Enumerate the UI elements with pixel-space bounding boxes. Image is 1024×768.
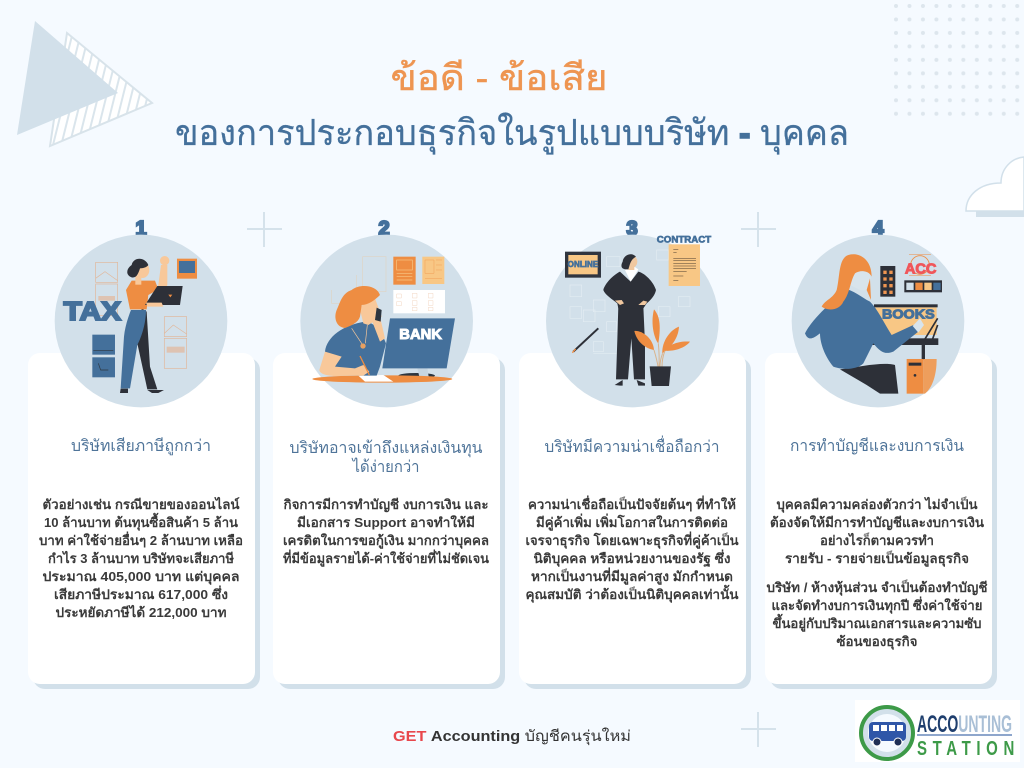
number 2: 2	[378, 218, 390, 240]
decoration: dot grid	[893, 0, 1024, 120]
card 4 body: ซ้อนของธุรกิจ	[836, 634, 918, 650]
illustration 3: woman in suit with plant: ONLINE	[568, 259, 599, 269]
card 1 body: เสียภาษีประมาณ 617,000 ซึ่ง	[54, 585, 228, 602]
subtitle: ของการประกอบธุรกิจในรูปแบบบริษัท - บุคคล	[175, 112, 849, 155]
card 2 heading: ได้ง่ายกว่า	[351, 457, 420, 476]
card 3 body: คุณสมบัติ ว่าต้องเป็นนิติบุคคลเท่านั้น	[526, 584, 739, 603]
card 2 heading	[290, 439, 483, 476]
card 2 body	[283, 497, 489, 567]
card 1 body: ประหยัดภาษีได้ 212,000 บาท	[56, 604, 226, 620]
illustration 4: woman at drawing board	[792, 235, 964, 407]
card 2 body: เครดิตในการขอกู้เงิน มากกว่าบุคคล	[283, 532, 489, 549]
illustration 2: bank woman at desk: BANK	[399, 327, 442, 343]
panel: card 4	[765, 353, 997, 689]
number 1: 1	[135, 218, 147, 240]
card 3 body: หากเป็นงานที่มีมูลค่าสูง มักกำหนด	[531, 567, 733, 585]
card 4 body: ขึ้นอยู่กับปริมาณเอกสารและความซับ	[772, 613, 982, 632]
logo: Accounting Station: STATION	[917, 737, 1020, 760]
illustration 2: bank woman at desk	[300, 235, 473, 407]
illustration 3: woman in suit with plant	[546, 235, 719, 407]
card 1 heading: บริษัทเสียภาษีถูกกว่า	[71, 437, 211, 456]
card 3 body: นิติบุคคล หรือหน่วยงานของรัฐ ซึ่ง	[534, 549, 730, 568]
card 2 body: ที่มีข้อมูลรายได้-ค่าใช้จ่ายที่ไม่ชัดเจน	[283, 549, 489, 567]
illustration 3: woman in suit with plant: CONTRACT	[657, 235, 711, 245]
card 1 body	[39, 496, 243, 620]
card 1 body: ตัวอย่างเช่น กรณีขายของออนไลน์	[42, 496, 240, 512]
card 4 body: รายรับ - รายจ่ายเป็นข้อมูลธุรกิจ	[785, 549, 969, 567]
panel: card 1	[28, 353, 260, 689]
card 2 body: มีเอกสาร Support อาจทำให้มี	[297, 514, 475, 530]
decoration: plus signs	[247, 212, 776, 747]
logo: Accounting Station	[855, 700, 1020, 762]
card 4 heading: การทำบัญชีและงบการเงิน	[790, 437, 964, 455]
card 2 heading: บริษัทอาจเข้าถึงแหล่งเงินทุน	[290, 439, 483, 458]
illustration 1: tax woman with laptop	[55, 235, 227, 407]
footer tagline: GET Accounting บัญชีคนรุ่นใหม่	[393, 727, 631, 746]
card 4 body: บุคคลมีความคล่องตัวกว่า ไม่จำเป็น	[776, 495, 978, 513]
illustration 4: woman at drawing board: ACC	[905, 261, 937, 277]
title: ข้อดี - ข้อเสีย	[390, 57, 608, 98]
decoration: cloud	[966, 157, 1024, 217]
card 4 body: บริษัท / ห้างหุ้นส่วน จำเป็นต้องทำบัญชี	[766, 578, 988, 596]
card 3 body	[526, 495, 739, 603]
card 1 body: 10 ล้านบาท ต้นทุนซื้อสินค้า 5 ล้าน	[44, 512, 238, 531]
card 2 body: กิจการมีการทำบัญชี งบการเงิน และ	[283, 497, 489, 513]
card 4 body: และจัดทำงบการเงินทุกปี ซึ่งค่าใช้จ่าย	[772, 596, 982, 614]
illustration 1: tax woman with laptop: TAX	[64, 296, 122, 326]
card 4 body	[766, 495, 988, 650]
card 3 heading: บริษัทมีความน่าเชื่อถือกว่า	[544, 435, 720, 456]
panel: card 2	[273, 353, 505, 689]
card 1 body: ประมาณ 405,000 บาท แต่บุคคล	[42, 569, 240, 585]
number 4: 4	[872, 218, 884, 240]
card 3 body: มีคู่ค้าเพิ่ม เพิ่มโอกาสในการติดต่อ	[536, 513, 728, 531]
panel: card 3	[519, 353, 751, 689]
card 3 body: ความน่าเชื่อถือเป็นปัจจัยต้นๆ ที่ทำให้	[528, 495, 736, 512]
card 1 body: กำไร 3 ล้านบาท บริษัทจะเสียภาษี	[48, 550, 234, 566]
illustration 4: woman at drawing board: BOOKS	[882, 307, 935, 322]
decoration: triangles	[17, 21, 152, 146]
card 3 body: เจรจาธุรกิจ โดยเฉพาะธุรกิจที่คู่ค้าเป็น	[526, 531, 739, 549]
card 1 body: บาท ค่าใช้จ่ายอื่นๆ 2 ล้านบาท เหลือ	[39, 531, 243, 548]
number 3: 3	[626, 218, 638, 240]
card 4 body: ต้องจัดให้มีการทำบัญชีและงบการเงิน	[770, 514, 984, 531]
card 4 body: อย่างไรก็ตามควรทำ	[820, 531, 934, 548]
